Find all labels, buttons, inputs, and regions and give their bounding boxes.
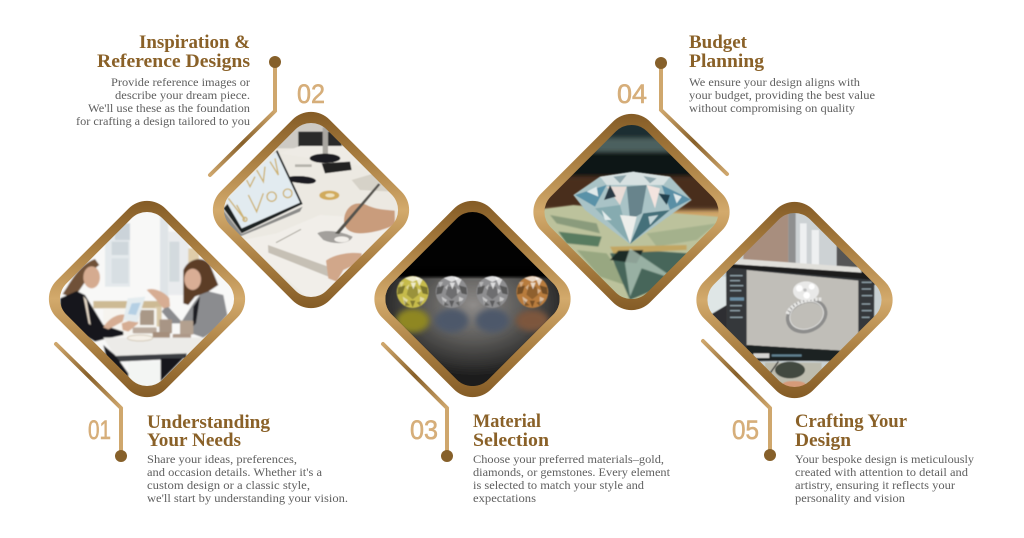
step 04: budget planning — [523, 32, 875, 321]
step 05: crafting your design — [686, 190, 974, 505]
connector 04 — [655, 57, 727, 174]
body text 03: diamonds, or gemstones. Every element — [473, 465, 671, 479]
body text 01: custom design or a classic style, — [147, 478, 310, 492]
infographic: five-step design process — [48, 34, 974, 504]
heading 04: Budget — [689, 32, 748, 53]
photo: sketching a jewellery design beside a tablet — [224, 123, 398, 297]
heading 03: Material — [473, 411, 541, 432]
body text 01: and occasion details. Whether it's a — [147, 465, 323, 479]
heading 05: Design — [795, 430, 851, 451]
number 03: 03 — [410, 415, 438, 445]
body text 05: created with attention to detail and — [795, 465, 968, 479]
heading 04: Planning — [689, 51, 765, 72]
connector 05 — [703, 341, 776, 461]
photo: 3D ring model on a monitor — [708, 213, 882, 387]
photo: four coloured gemstones — [385, 212, 560, 386]
body text 03: Choose your preferred materials–gold, — [473, 452, 664, 466]
diamond frame 03 — [364, 190, 581, 408]
body text 02: Provide reference images or — [111, 75, 250, 89]
heading 01: Your Needs — [147, 430, 241, 451]
heading 03: Selection — [473, 430, 549, 451]
diamond frame 05 — [686, 191, 903, 409]
diamond frame 01 — [38, 190, 256, 408]
body text 05: artistry, ensuring it reflects your — [795, 478, 955, 492]
diamond frame 02 — [202, 101, 420, 319]
body text 04: your budget, providing the best value — [689, 88, 875, 102]
step 03: material selection — [364, 190, 671, 505]
heading 02: Inspiration & — [139, 32, 250, 53]
connector 03 — [383, 344, 453, 462]
number 04: 04 — [617, 79, 647, 109]
photo: diamond resting on banknotes — [544, 125, 718, 299]
body text 03: expectations — [473, 491, 536, 505]
body text 04: without compromising on quality — [689, 101, 855, 115]
body text 04: We ensure your design aligns with — [689, 75, 860, 89]
body text 01: Share your ideas, preferences, — [147, 452, 297, 466]
heading 05: Crafting Your — [795, 411, 908, 432]
body text 05: Your bespoke design is meticulously — [795, 452, 974, 466]
body text 02: describe your dream piece. — [115, 88, 250, 102]
photo: two women in consultation — [60, 212, 234, 386]
body text 05: personality and vision — [795, 491, 905, 505]
step 02: inspiration and reference designs — [76, 32, 420, 319]
connector 02 — [210, 56, 281, 175]
heading 01: Understanding — [147, 412, 271, 433]
number 01: 01 — [88, 415, 111, 445]
connector 01 — [56, 344, 127, 462]
diamond frame 04 — [523, 103, 740, 321]
number 05: 05 — [732, 415, 759, 445]
body text 03: is selected to match your style and — [473, 478, 644, 492]
number 02: 02 — [297, 79, 325, 109]
heading 02: Reference Designs — [97, 51, 250, 72]
body text 02: for crafting a design tailored to you — [76, 114, 250, 128]
step 01: understanding your needs — [38, 190, 348, 505]
body text 02: We'll use these as the foundation — [88, 101, 250, 115]
body text 01: we'll start by understanding your vision. — [147, 491, 348, 505]
